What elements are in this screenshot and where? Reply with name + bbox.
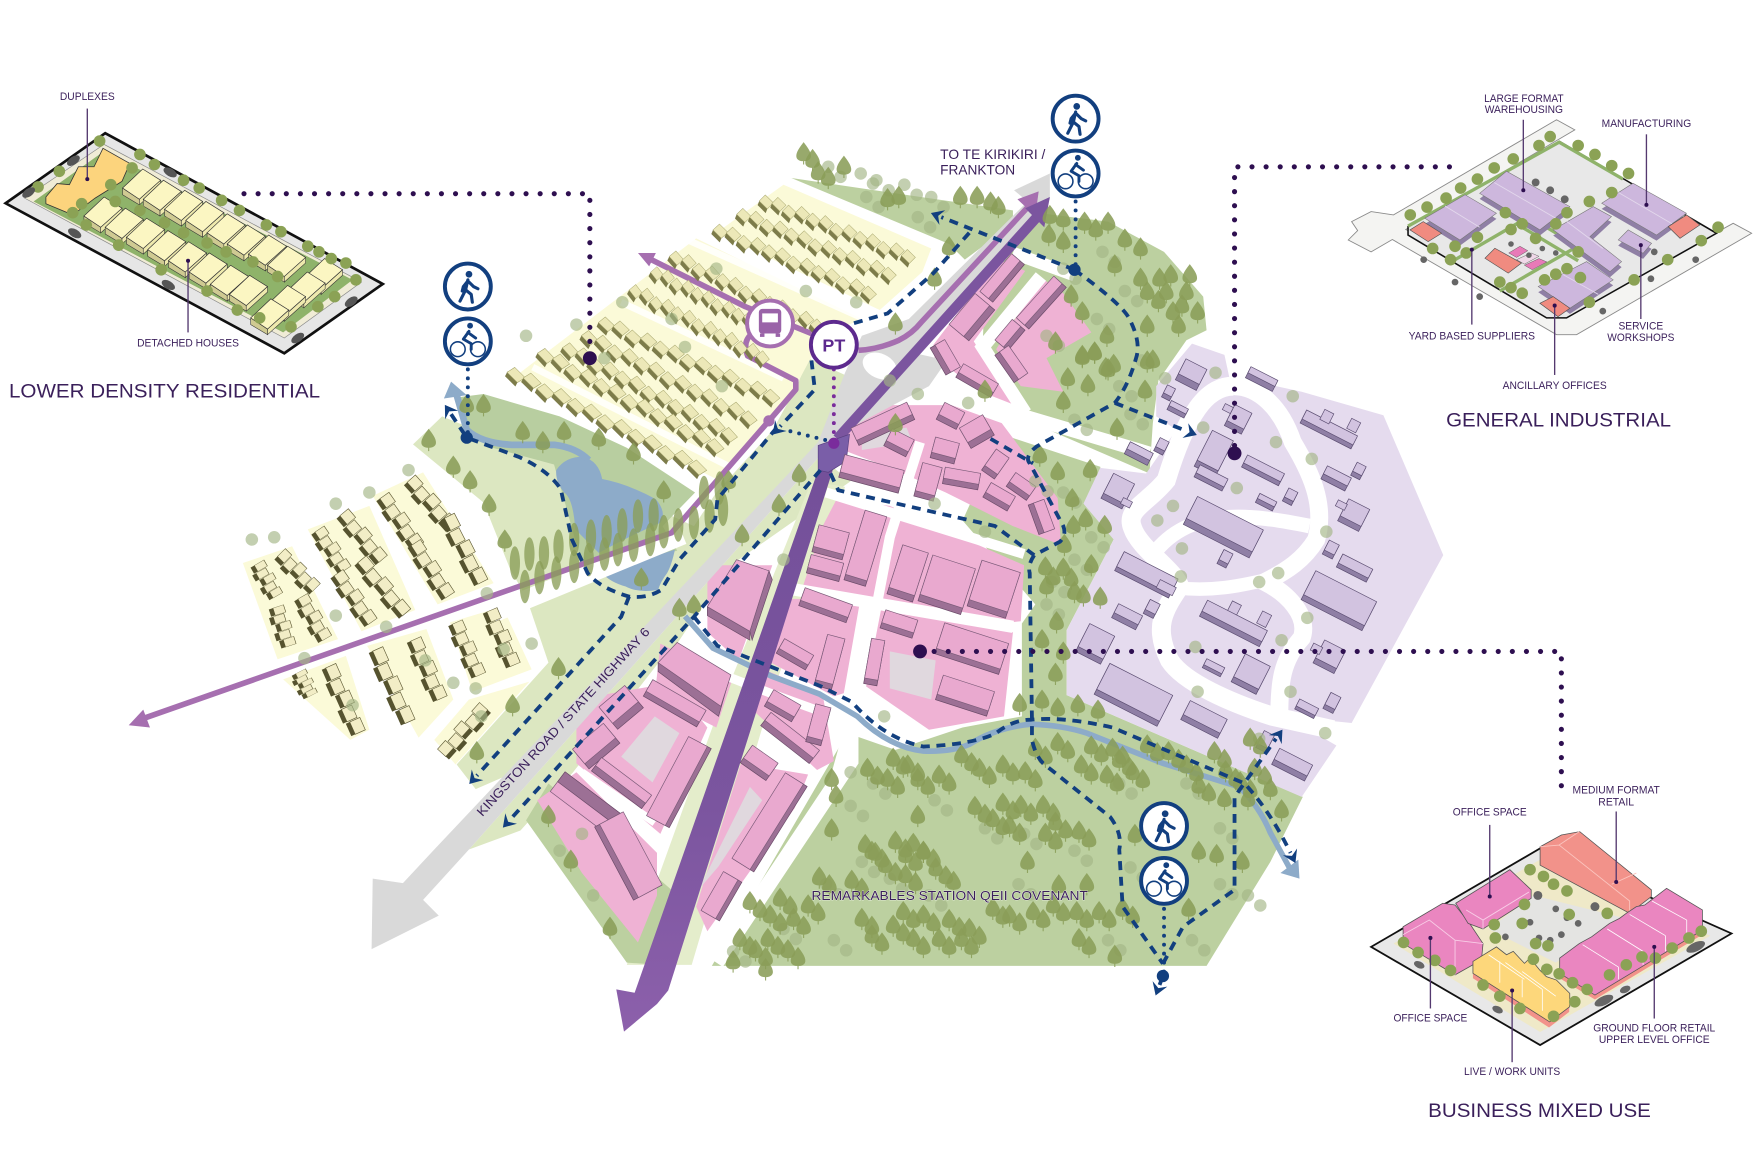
panel: general industrial (1348, 93, 1752, 431)
land: north east park (983, 213, 1207, 473)
land: wooded stream corridor and pond banks (458, 394, 695, 573)
callout: large format warehousing: LARGE FORMAT (1484, 93, 1564, 105)
dotted leader: industrial (1228, 167, 1449, 460)
retail roof lines (1540, 832, 1636, 913)
pale round trees (246, 161, 1333, 968)
icon: cycling north (1053, 151, 1099, 196)
dotted leader: residential (244, 194, 597, 365)
callout: medium format retail (1573, 785, 1660, 884)
callout: large format warehousing: WAREHOUSING (1485, 104, 1563, 116)
roof ridges (1445, 182, 1672, 294)
heading: BUSINESS MIXED USE (1428, 1100, 1651, 1122)
warehouses (1425, 171, 1687, 308)
callout: duplexes (60, 91, 115, 181)
public transport hub marker (811, 322, 857, 368)
planting strips (1408, 142, 1623, 291)
land: west residential lots (243, 472, 532, 764)
covenant label: REMARKABLES STATION QEII COVENANT (811, 888, 1088, 903)
heading: GENERAL INDUSTRIAL (1446, 409, 1671, 431)
panel: lower density residential (6, 91, 383, 402)
callout: office space north (1453, 806, 1527, 899)
poplar avenue along the green link (510, 471, 728, 603)
icon: walking south (1141, 803, 1187, 849)
dotted leader: mixed use (913, 644, 1561, 797)
central car park (1489, 895, 1623, 963)
callout: office space north: OFFICE SPACE (1453, 806, 1527, 818)
offices (1410, 215, 1700, 317)
courtyard car parks (621, 428, 936, 890)
ridge lines on retail (1583, 901, 1687, 979)
site (1408, 142, 1716, 318)
site plate (6, 133, 383, 353)
callout: ancillary offices (1503, 304, 1607, 392)
trees (1404, 131, 1724, 308)
callout: medium format retail: RETAIL (1598, 796, 1634, 808)
callout: service workshops (1607, 243, 1674, 344)
callout: ground floor retail upper level office: GROUND FLOOR RETAIL (1593, 1022, 1715, 1034)
callout: ground floor retail upper level office (1593, 945, 1715, 1046)
land: northern green band (791, 178, 1013, 260)
trees (32, 135, 362, 333)
parked cars (1420, 179, 1699, 315)
land: central green corridor (712, 434, 1303, 966)
masterplan map (129, 96, 1443, 1032)
main public transport spine arrow (616, 197, 1050, 1032)
destination label: FRANKTON (940, 163, 1015, 178)
duplexes (46, 148, 130, 215)
general industrial buildings (1076, 359, 1377, 781)
parked cars (1413, 891, 1707, 1015)
callout: service workshops: SERVICE (1618, 321, 1663, 333)
icon: bus stop (747, 301, 793, 346)
destination label: TO TE KIRIKIRI / (940, 147, 1046, 162)
icon: cycling west (445, 318, 491, 364)
callout: live work units: LIVE / WORK UNITS (1464, 1066, 1560, 1078)
salmon retail block (1540, 832, 1651, 913)
callout: detached houses: DETACHED HOUSES (137, 337, 239, 349)
site plate (1371, 848, 1731, 1045)
west residential houses (248, 474, 521, 761)
navy walking and cycling routes (451, 201, 1291, 985)
station marker dot and link (828, 369, 839, 449)
land: business mixed use zones (537, 260, 1091, 942)
live work units (1473, 947, 1570, 1022)
heading: LOWER DENSITY RESIDENTIAL (9, 380, 320, 402)
live work ridge lines (1489, 955, 1556, 1011)
callout: manufacturing: MANUFACTURING (1602, 118, 1691, 130)
north residential houses (502, 192, 918, 482)
office block west (1403, 903, 1483, 975)
white local streets (533, 233, 1333, 963)
retail with office above (1560, 888, 1702, 995)
west bus route (129, 191, 1039, 728)
detached houses (84, 169, 342, 335)
stream with arrow to the south east (685, 616, 1299, 879)
callout: medium format retail: MEDIUM FORMAT (1573, 785, 1660, 797)
land: pale verge along spine (627, 481, 845, 965)
white green link road (492, 535, 683, 613)
land: east road verge (469, 457, 851, 850)
callout: ground floor retail upper level office: UPPER LEVEL OFFICE (1599, 1034, 1710, 1046)
callout: office space west: OFFICE SPACE (1393, 1012, 1467, 1024)
callout: ancillary offices: ANCILLARY OFFICES (1503, 380, 1607, 392)
cars (20, 153, 359, 346)
Kingston Road State Highway 6 (372, 173, 1050, 949)
roundabout island (858, 347, 901, 385)
stormwater ponds (556, 457, 675, 591)
callout: detached houses (137, 259, 239, 349)
road label: KINGSTON ROAD / STATE HIGHWAY 6 (474, 624, 653, 819)
office roof lines (1403, 892, 1529, 975)
office block north (1456, 870, 1531, 929)
live work salmon base (1473, 969, 1569, 1027)
callout: large format warehousing (1484, 93, 1564, 192)
land: south west green (526, 783, 672, 965)
station stop (818, 434, 850, 472)
conifer trees (421, 142, 1289, 980)
callout: live work units (1464, 989, 1560, 1078)
callout: manufacturing (1602, 118, 1691, 207)
callout: office space west (1393, 936, 1467, 1024)
icon: cycling south (1141, 858, 1187, 904)
icon: walking west (445, 264, 491, 309)
public transport hub marker: PT (822, 335, 845, 355)
land: north residential lots (513, 185, 931, 479)
callout: yard based suppliers (1409, 248, 1535, 343)
street (1348, 120, 1752, 335)
callout: duplexes: DUPLEXES (60, 91, 115, 103)
icon: walking north (1053, 96, 1099, 142)
panel: business mixed use (1371, 785, 1731, 1122)
pink mixed use buildings (550, 254, 1066, 921)
callout: service workshops: WORKSHOPS (1607, 332, 1674, 344)
yard supplier stock (1509, 246, 1547, 270)
land: west park (413, 358, 845, 789)
warehouse walls (1425, 177, 1687, 314)
ground floor retail base (1560, 926, 1702, 1000)
land: general industrial zone (1067, 344, 1443, 797)
trees (1398, 864, 1707, 1022)
stream with arrow to the north west (444, 382, 589, 460)
callout: yard based suppliers: YARD BASED SUPPLIERS (1409, 331, 1535, 343)
